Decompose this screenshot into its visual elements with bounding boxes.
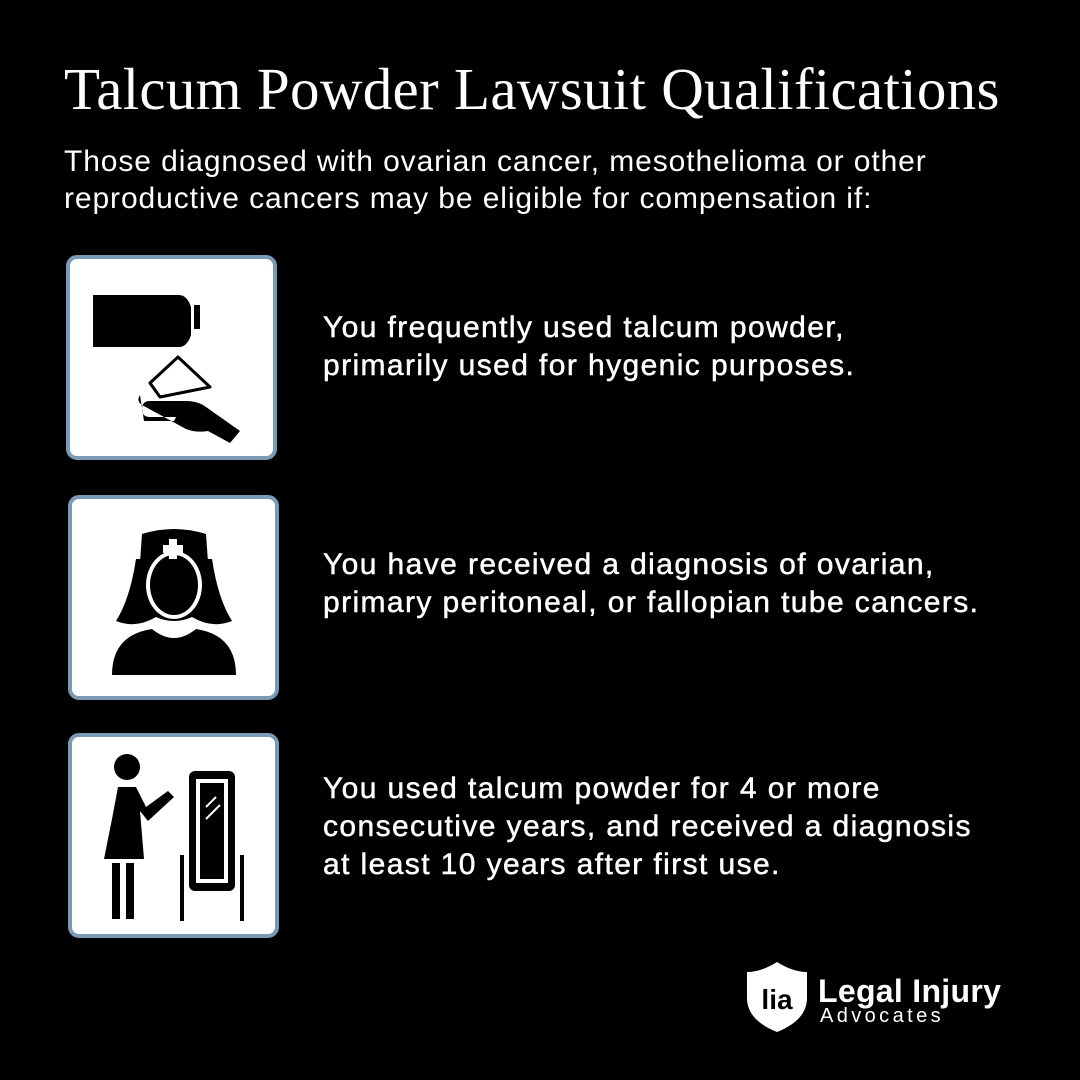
logo: [747, 962, 1001, 1032]
text 1: You frequently used talcum powder,: [323, 311, 845, 344]
title: Talcum Powder Lawsuit Qualifications: [64, 56, 1000, 122]
text 2: primary peritoneal, or fallopian tube cancers.: [323, 586, 979, 619]
icon: shield: [747, 962, 807, 1032]
text 3: at least 10 years after first use.: [323, 848, 781, 881]
text 3: consecutive years, and received a diagnosis: [323, 810, 972, 843]
panel: powder icon: [66, 255, 277, 460]
icon: bottle: [93, 295, 200, 347]
text 2: You have received a diagnosis of ovarian,: [323, 548, 935, 581]
subtitle: Those diagnosed with ovarian cancer, mesothelioma or other: [64, 145, 927, 178]
icon: woman at mirror: [104, 754, 244, 921]
subtitle: reproductive cancers may be eligible for compensation if:: [64, 182, 872, 215]
logo text: Legal Injury: [818, 973, 1001, 1009]
logo: Advocates: [820, 1005, 944, 1027]
text 1: [323, 311, 855, 382]
text 1: primarily used for hygenic purposes.: [323, 349, 855, 382]
icon: shield: lia: [761, 984, 793, 1015]
icon: hand with powder: [138, 357, 240, 443]
panel: nurse icon: [68, 495, 279, 700]
subtitle: [64, 145, 927, 215]
text 3: [323, 772, 972, 881]
text 3: You used talcum powder for 4 or more: [323, 772, 881, 805]
icon: nurse: [112, 529, 236, 675]
text 2: [323, 548, 979, 619]
panel: mirror icon: [68, 733, 279, 938]
